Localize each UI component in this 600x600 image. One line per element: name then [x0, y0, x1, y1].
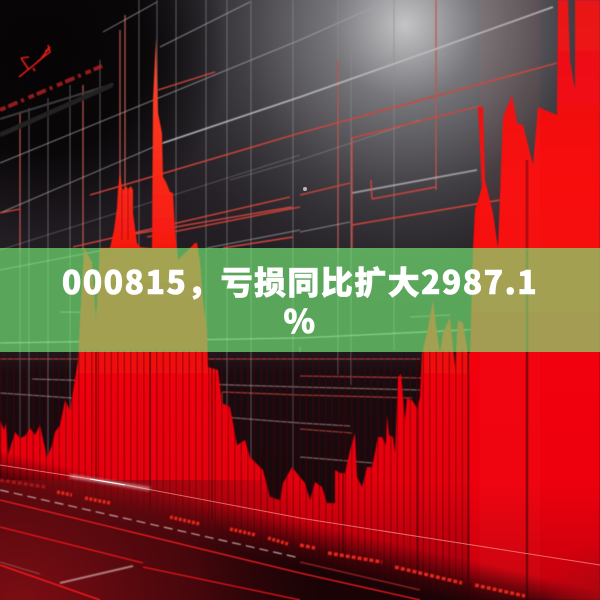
top-left readout — [0, 66, 113, 135]
top-left red glyph — [19, 45, 50, 77]
floor fade — [0, 440, 600, 600]
grey diagonals — [0, 0, 553, 250]
title: 000815，亏损同比扩大2987.1 — [62, 258, 538, 304]
chart readout marks — [0, 480, 525, 596]
title: % — [284, 297, 316, 343]
right floating readout — [240, 422, 296, 424]
floor lines — [0, 490, 420, 600]
glowing baseline — [0, 465, 600, 565]
red wall: right side — [470, 0, 600, 600]
banner-zone lines — [0, 245, 560, 343]
title banner — [0, 248, 600, 352]
red diagonals — [0, 63, 557, 248]
lower grid — [0, 359, 423, 490]
pale grid dot — [303, 187, 307, 191]
title — [62, 258, 538, 343]
red bar silhouette: left and centre — [0, 38, 472, 600]
